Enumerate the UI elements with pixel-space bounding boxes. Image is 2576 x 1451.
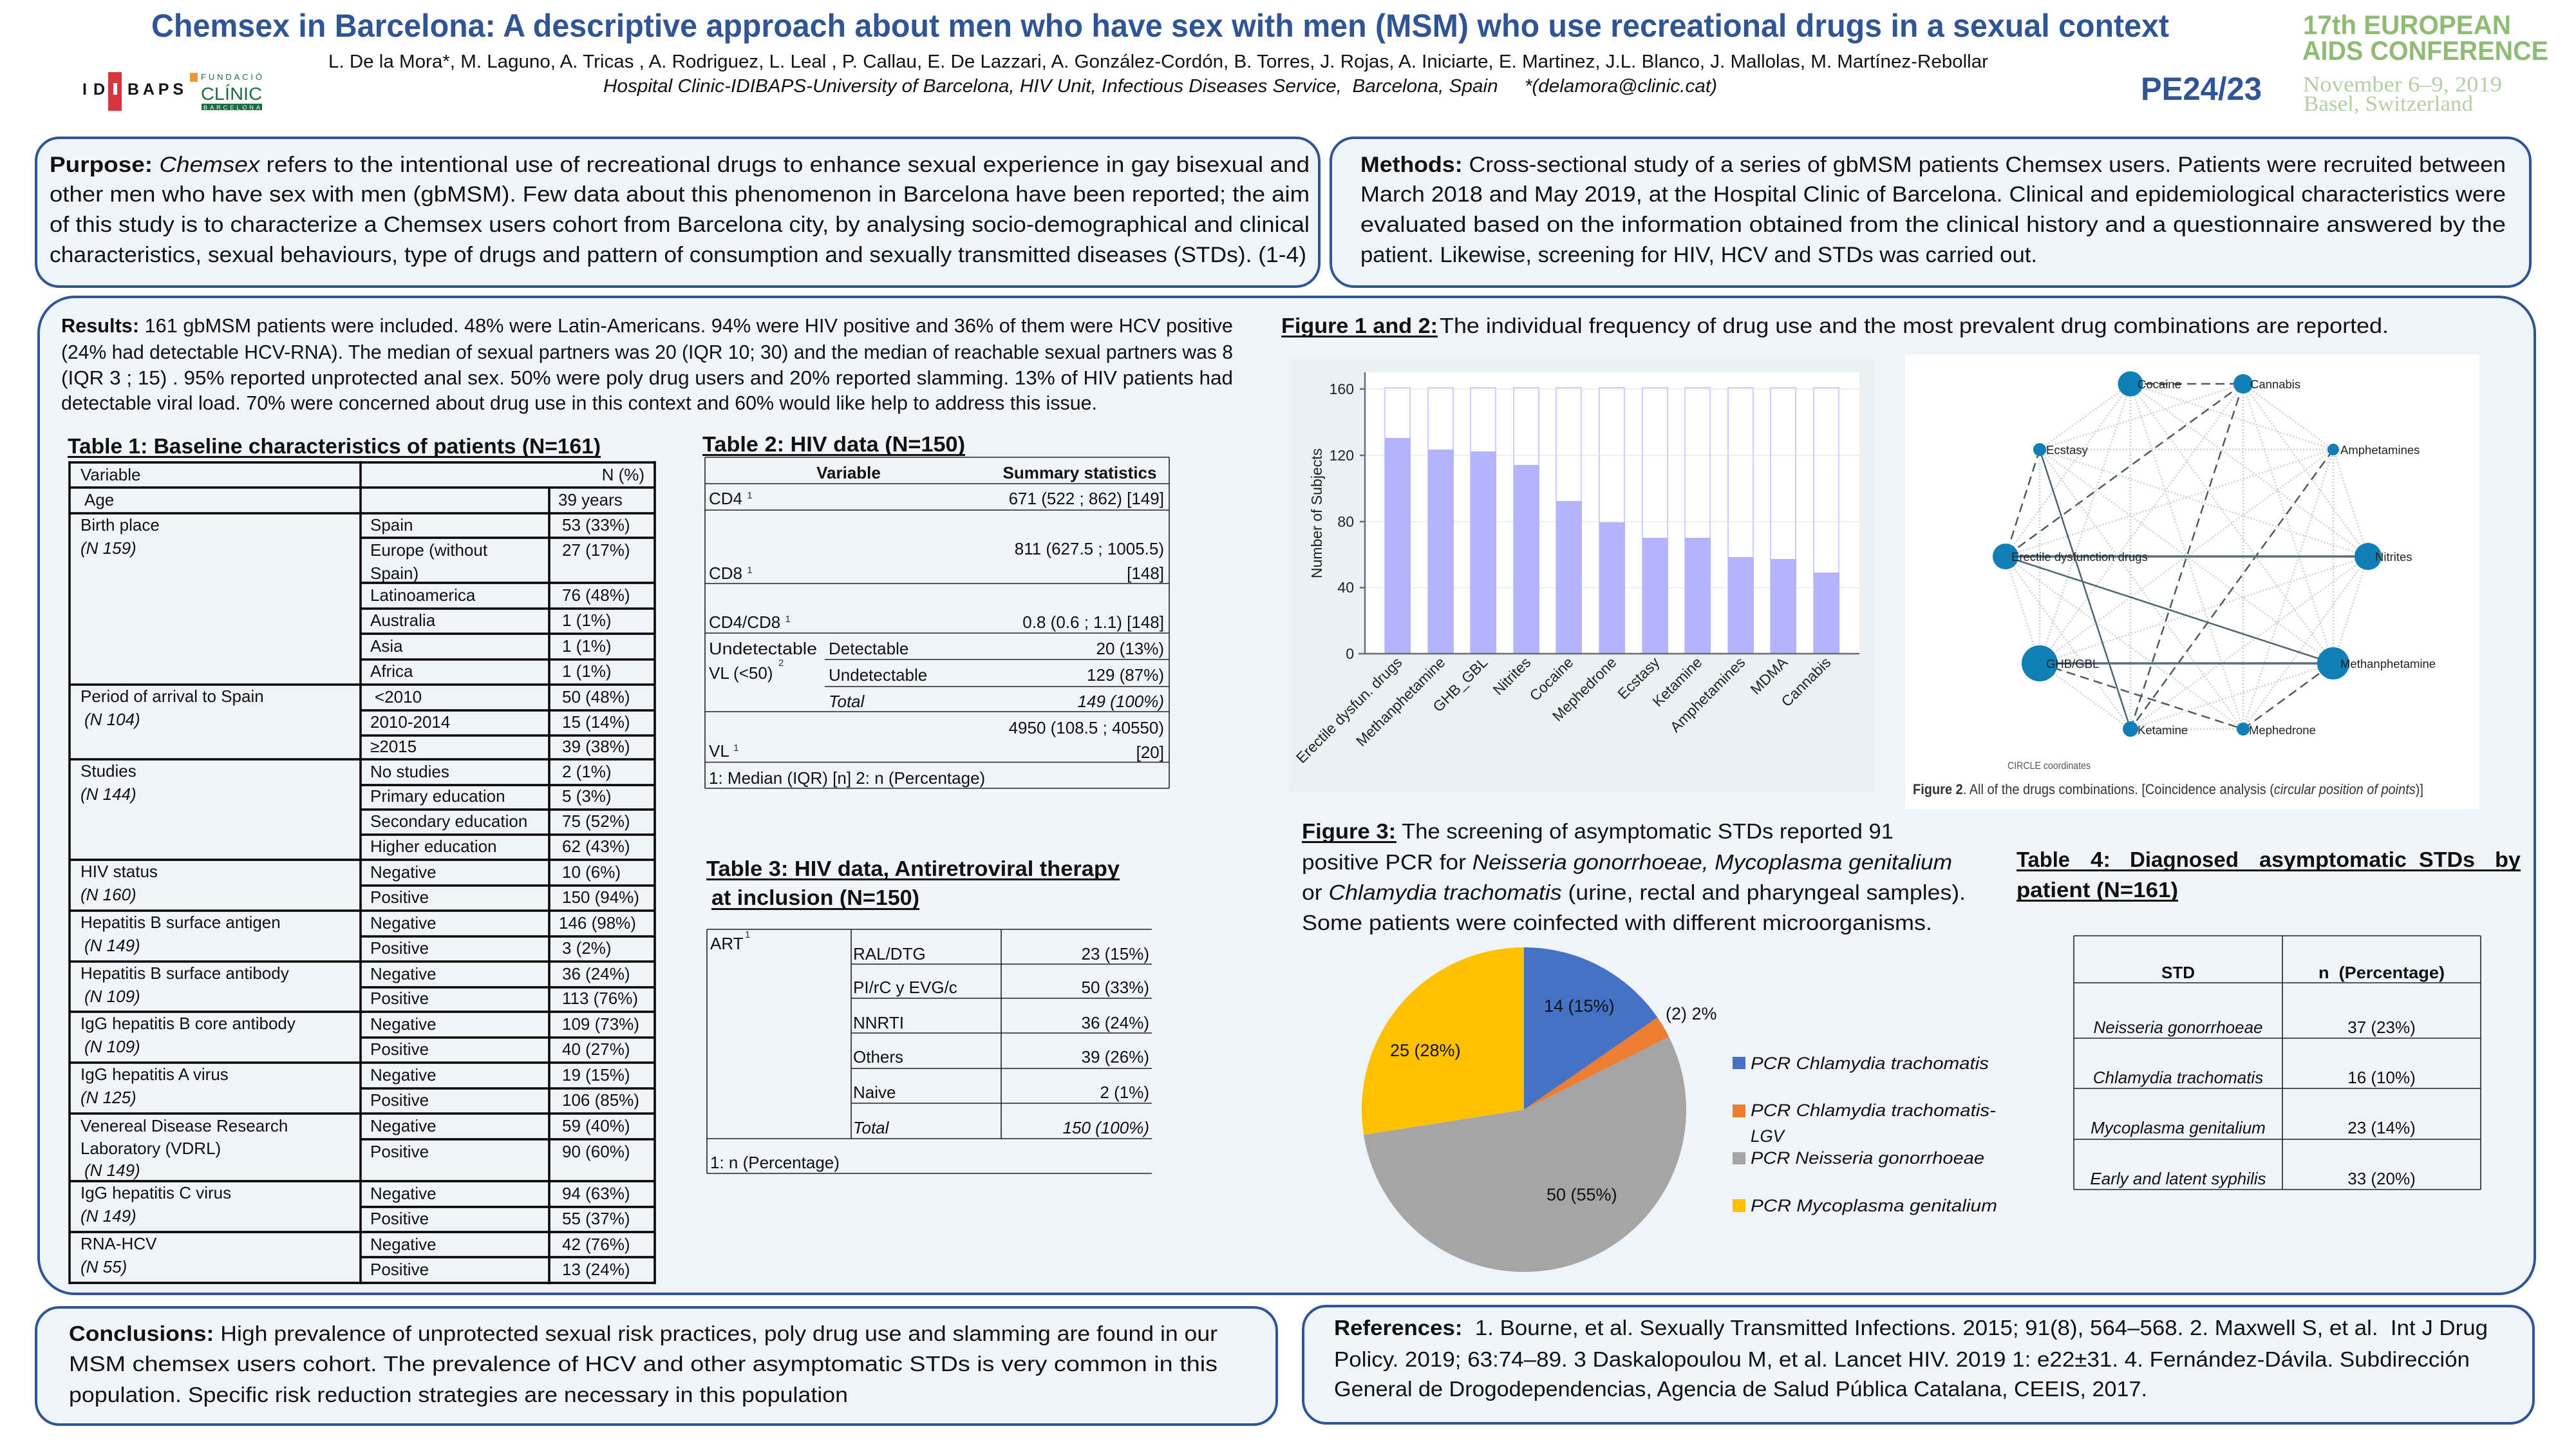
table 1: baseline characteristics: 94 (63%)	[562, 1184, 630, 1203]
x axis labels: Cocaine	[1526, 654, 1577, 704]
table 2: HIV data: 671 (522 ; 862) [149]	[1009, 489, 1164, 508]
y axis labels: 0	[1346, 645, 1354, 662]
pie chart: asymptomatic STDs: 14 (15%)	[1544, 996, 1615, 1016]
table 1: baseline characteristics: 90 (60%)	[562, 1142, 630, 1161]
table 4: diagnosed asymptomatic STDs: 33 (20%)	[2347, 1169, 2416, 1188]
table 1: baseline characteristics: 42 (76%)	[562, 1235, 630, 1254]
affiliation: Hospital Clinic-IDIBAPS-University of Barcelona, HIV Unit, Infectious Diseases Service, Barcelona, Spain *(delamora@clinic.cat)	[603, 76, 1717, 97]
table 1: baseline characteristics: IgG hepatitis C virus	[80, 1183, 231, 1202]
table 2: HIV data: [20]	[1136, 743, 1164, 762]
table 2: HIV data: Undetectable	[829, 665, 927, 685]
conference logo: Basel, Switzerland	[2304, 92, 2473, 116]
table 3: antiretroviral therapy: ART	[710, 934, 744, 953]
table 2: HIV data: 20 (13%)	[1096, 639, 1164, 658]
table 3: antiretroviral therapy: 1	[745, 929, 750, 940]
table 2: HIV data: Undetectable	[709, 639, 817, 658]
table 2: HIV data: Total	[829, 692, 865, 711]
table 1: baseline characteristics: 1 (1%)	[562, 636, 612, 656]
table 1: baseline characteristics: (N 144)	[80, 784, 136, 804]
panel: conclusions: population. Specific risk reduction strategies are necessary in this population	[69, 1383, 848, 1407]
table 4: diagnosed asymptomatic STDs: 23 (14%)	[2347, 1118, 2416, 1137]
table 4: diagnosed asymptomatic STDs: n (Percentage)	[2318, 963, 2445, 982]
table 1: baseline characteristics: IgG hepatitis A virus	[80, 1065, 229, 1084]
table 2: HIV data: Detectable	[829, 639, 908, 658]
logo: IDIBAPS: BAPS	[127, 81, 183, 99]
pie chart legend: PCR Chlamydia trachomatis	[1751, 1054, 1989, 1073]
network diagram: drug combinations: Cocaine	[2138, 377, 2181, 391]
x axis labels: Ketamine	[1649, 654, 1706, 710]
table 3: antiretroviral therapy: PI/rC y EVG/c	[853, 978, 957, 997]
network diagram: drug combinations: CIRCLE coordinates	[2007, 761, 2091, 772]
x axis labels	[1293, 654, 1834, 766]
results text: Results: 161 gbMSM patients were included. 48% were Latin-Americans. 94% were HIV positive and 36% of them were HCV positive	[61, 314, 1233, 337]
results text	[61, 314, 1233, 414]
table 1: baseline characteristics: Positive	[370, 887, 429, 907]
table 1: baseline characteristics: Laboratory (VDRL)	[80, 1139, 221, 1158]
table 4: diagnosed asymptomatic STDs: 16 (10%)	[2347, 1068, 2416, 1087]
table 3 heading: at inclusion (N=150)	[711, 886, 919, 909]
table 2: HIV data: VL	[709, 741, 729, 761]
table 1: baseline characteristics: Birth place	[80, 515, 160, 535]
table 3: antiretroviral therapy: 36 (24%)	[1082, 1013, 1149, 1032]
y axis labels: 80	[1337, 513, 1354, 530]
panel: purpose	[36, 138, 1319, 287]
panel: results	[39, 297, 2535, 1294]
table 1: baseline characteristics: Studies	[80, 761, 136, 781]
table 1: baseline characteristics: Positive	[370, 989, 429, 1008]
table 4 heading: STDs	[2419, 848, 2475, 871]
table 1: baseline characteristics: Hepatitis B surface antigen	[80, 913, 281, 932]
table 1: baseline characteristics: (N 109)	[84, 987, 140, 1006]
table 1: baseline characteristics: Spain)	[370, 564, 418, 583]
panel: methods: evaluated based on the information obtained from the clinical history and a questionnaire answered by the	[1360, 213, 2506, 237]
table 1: baseline characteristics: Age	[84, 490, 114, 509]
table 4: diagnosed asymptomatic STDs: 37 (23%)	[2347, 1018, 2416, 1037]
x axis labels: Erectile dysfun. drugs	[1293, 654, 1406, 766]
x axis labels: Ecstasy	[1614, 654, 1663, 702]
logo: Fundació Clínic: FUNDACIÓ	[201, 72, 262, 82]
table 2 heading: Table 2: HIV data (N=150)	[702, 432, 965, 456]
x axis labels: Cannabis	[1778, 654, 1834, 710]
table 2: HIV data: 149 (100%)	[1078, 692, 1164, 711]
table 1: baseline characteristics: 62 (43%)	[562, 837, 630, 856]
pie chart: asymptomatic STDs: (2) 2%	[1666, 1004, 1717, 1023]
table 1: baseline characteristics: Spain	[370, 515, 413, 535]
table 4: diagnosed asymptomatic STDs: STD	[2161, 963, 2195, 982]
table 1: baseline characteristics: RNA-HCV	[80, 1234, 157, 1253]
table 1: baseline characteristics: Negative	[370, 964, 437, 983]
table 1: baseline characteristics: Positive	[370, 1260, 429, 1279]
y axis labels: 120	[1330, 447, 1354, 464]
table 1: baseline characteristics: 75 (52%)	[562, 811, 630, 831]
table 3: antiretroviral therapy: 150 (100%)	[1063, 1118, 1149, 1137]
table 1: baseline characteristics: 146 (98%)	[559, 913, 636, 933]
table 1: baseline characteristics: Negative	[370, 1184, 437, 1203]
table 3 heading: Table 3: HIV data, Antiretroviral therapy	[706, 857, 1120, 880]
table 3: antiretroviral therapy: 2 (1%)	[1100, 1083, 1149, 1102]
table 4: diagnosed asymptomatic STDs: Chlamydia trachomatis	[2093, 1068, 2263, 1087]
network diagram: drug combinations	[1905, 355, 2479, 809]
pie chart legend: PCR Mycoplasma genitalium	[1751, 1196, 1997, 1215]
table 2: HIV data: VL (<50)	[709, 663, 773, 683]
table 1: baseline characteristics: Negative	[370, 1235, 437, 1254]
table 1: baseline characteristics: HIV status	[80, 862, 158, 881]
table 1: baseline characteristics: 1 (1%)	[562, 661, 612, 681]
table 1: baseline characteristics: Negative	[370, 1116, 437, 1135]
network diagram: drug combinations: Mephedrone	[2249, 723, 2316, 737]
table 1: baseline characteristics: <2010	[375, 687, 422, 707]
table 1: baseline characteristics	[70, 461, 655, 1284]
table 3: antiretroviral therapy: Others	[853, 1047, 903, 1067]
table 1: baseline characteristics: Positive	[370, 938, 429, 958]
logo: Fundació Clínic	[190, 72, 262, 111]
bar chart: drug frequency	[1289, 359, 1874, 792]
table 1: baseline characteristics: 150 (94%)	[562, 887, 639, 907]
filled bars	[1385, 438, 1839, 654]
table 4: diagnosed asymptomatic STDs	[2074, 936, 2481, 1190]
table 1: baseline characteristics: (N 149)	[84, 1161, 140, 1180]
table 2: HIV data: 0.8 (0.6 ; 1.1) [148]	[1022, 612, 1164, 632]
pie chart: asymptomatic STDs: 25 (28%)	[1390, 1041, 1461, 1060]
y axis labels: 160	[1330, 381, 1354, 397]
x axis labels: MDMA	[1747, 654, 1791, 697]
table 2: HIV data: 1	[747, 565, 753, 576]
table 1: baseline characteristics: Australia	[370, 611, 436, 630]
network diagram: drug combinations: Figure 2. All of the drugs combinations. [Coincidence analysis (circular position of points)]	[1913, 781, 2423, 797]
table 1: baseline characteristics: ≥2015	[370, 737, 417, 756]
table 2: HIV data: 129 (87%)	[1087, 665, 1164, 685]
table 1: baseline characteristics: IgG hepatitis B core antibody	[80, 1014, 296, 1033]
panel: methods	[1331, 138, 2530, 287]
table 1: baseline characteristics: Positive	[370, 1209, 429, 1228]
pie chart legend: PCR Chlamydia trachomatis-	[1751, 1101, 1996, 1120]
table 1: baseline characteristics: Negative	[370, 1014, 437, 1034]
table 4 heading: by	[2495, 848, 2521, 871]
table 3: antiretroviral therapy: RAL/DTG	[853, 944, 926, 963]
table 4: diagnosed asymptomatic STDs: Early and latent syphilis	[2090, 1169, 2266, 1188]
network diagram: drug combinations: GHB/GBL	[2046, 657, 2099, 670]
table 1: baseline characteristics: Primary education	[370, 786, 505, 806]
table 1: baseline characteristics: (N 149)	[80, 1206, 136, 1226]
pie chart: asymptomatic STDs	[1362, 947, 1717, 1272]
table 1: baseline characteristics: Positive	[370, 1090, 429, 1110]
panel: methods: patient. Likewise, screening for HIV, HCV and STDs was carried out.	[1360, 243, 2037, 267]
table 1: baseline characteristics: (N 125)	[80, 1088, 136, 1107]
table 1: baseline characteristics: 55 (37%)	[562, 1209, 630, 1228]
table 4 heading: Table	[2017, 848, 2070, 871]
table 1: baseline characteristics: Negative	[370, 1065, 437, 1085]
y axis labels	[1308, 381, 1354, 662]
table 1: baseline characteristics: 53 (33%)	[562, 515, 630, 535]
figure 3 text: Figure 3: The screening of asymptomatic STDs reported 91	[1302, 819, 1894, 843]
table 1: baseline characteristics: 59 (40%)	[562, 1116, 630, 1135]
table 4: diagnosed asymptomatic STDs: Mycoplasma genitalium	[2091, 1118, 2266, 1137]
network diagram: drug combinations: Erectile dysfunction drugs	[2011, 550, 2148, 564]
x axis labels: Nitrites	[1490, 654, 1534, 698]
table 3: antiretroviral therapy	[707, 929, 1152, 1173]
table 2: HIV data: 1	[785, 614, 791, 625]
pie chart: asymptomatic STDs: 50 (55%)	[1547, 1185, 1617, 1204]
table 1: baseline characteristics: Latinoamerica	[370, 585, 476, 605]
table 1: baseline characteristics: Positive	[370, 1039, 429, 1059]
results text: (IQR 3 ; 15) . 95% reported unprotected anal sex. 50% were poly drug users and 20% reported slamming. 13% of HIV patients had	[61, 366, 1233, 389]
table 2: HIV data: 1	[747, 490, 753, 501]
logo: Fundació Clínic: BARCELONA	[203, 104, 260, 111]
x axis labels: Amphetamines	[1667, 654, 1749, 735]
x axis labels: Mephedrone	[1549, 654, 1620, 725]
table 1: baseline characteristics: 15 (14%)	[562, 712, 630, 732]
results text: (24% had detectable HCV-RNA). The median of sexual partners was 20 (IQR 10; 30) and the median of reachable sexual partners was 8	[61, 341, 1233, 363]
table 1: baseline characteristics: 3 (2%)	[562, 938, 612, 958]
table 1: baseline characteristics: 2 (1%)	[562, 762, 612, 781]
table 1: baseline characteristics: Negative	[370, 862, 437, 882]
table 1: baseline characteristics: 106 (85%)	[562, 1090, 639, 1110]
table 1: baseline characteristics: 2010-2014	[370, 712, 450, 732]
pie chart legend	[1733, 1054, 1997, 1215]
table 2: HIV data: CD4/CD8	[709, 612, 780, 632]
table 3: antiretroviral therapy: 39 (26%)	[1082, 1047, 1149, 1067]
table 1: baseline characteristics: Asia	[370, 636, 403, 656]
table 3: antiretroviral therapy: Naive	[853, 1083, 896, 1102]
panel: purpose: Purpose: Chemsex refers to the intentional use of recreational drugs to enhance sexual experience in gay bisexual and	[50, 153, 1310, 177]
table 1: baseline characteristics: Higher education	[370, 837, 497, 856]
network diagram: drug combinations: Methanphetamine	[2340, 657, 2436, 670]
table 1: baseline characteristics: (N 149)	[84, 936, 140, 955]
poster number: PE24/23	[2141, 71, 2262, 107]
panel: purpose: characteristics, sexual behaviours, type of drugs and pattern of consumption and sexually transmitted diseases (STDs). (1-4)	[50, 243, 1306, 267]
table 1: baseline characteristics: 36 (24%)	[562, 964, 630, 983]
table 1: baseline characteristics: Africa	[370, 661, 413, 681]
panel: references: Policy. 2019; 63:74–89. 3 Daskalopoulou M, et al. Lancet HIV. 2019 1: e22±31. 4. Fernández-Dávila. Subdirección	[1334, 1347, 2470, 1371]
conference logo: November 6–9, 2019	[2303, 73, 2502, 97]
panel: purpose: of this study is to characterize a Chemsex users cohort from Barcelona city, by analysing socio-demographical and clinical	[50, 213, 1310, 237]
figures 1 and 2 heading: Figure 1 and 2:	[1281, 314, 1438, 337]
table 2: HIV data: 2	[778, 658, 784, 669]
table 1: baseline characteristics: Period of arrival to Spain	[80, 687, 264, 706]
table 1: baseline characteristics: (N 160)	[80, 885, 136, 904]
x axis labels: GHB_GBL	[1429, 654, 1491, 715]
table 1: baseline characteristics: (N 159)	[80, 538, 136, 558]
figures 1 and 2 heading: The individual frequency of drug use and the most prevalent drug combinations are reported.	[1440, 314, 2389, 337]
pie chart legend: PCR Neisseria gonorrhoeae	[1751, 1148, 1984, 1168]
conference logo: AIDS CONFERENCE	[2302, 35, 2548, 66]
table 1: baseline characteristics: 10 (6%)	[562, 862, 621, 882]
panel: conclusions: MSM chemsex users cohort. The prevalence of HCV and other asymptomatic STDs is very common in this	[69, 1352, 1217, 1376]
panel: purpose: other men who have sex with men (gbMSM). Few data about this phenomenon in Barcelona have been reported; the aim	[50, 182, 1310, 207]
table 2: HIV data: Variable	[816, 463, 881, 482]
table 1: baseline characteristics: Secondary education	[370, 811, 527, 831]
panel: methods: March 2018 and May 2019, at the Hospital Clinic of Barcelona. Clinical and epidemiological characteristics were	[1360, 182, 2506, 207]
table 3: antiretroviral therapy: 50 (33%)	[1082, 978, 1149, 997]
table 4 heading: asymptomatic	[2259, 848, 2407, 871]
table 3 heading	[706, 857, 1120, 910]
table 2: HIV data: CD8	[709, 564, 742, 583]
table 1: baseline characteristics: No studies	[370, 762, 449, 781]
table 4 heading: Diagnosed	[2130, 848, 2239, 871]
table 1: baseline characteristics: (N 104)	[84, 710, 140, 729]
table 1: baseline characteristics: (N 109)	[84, 1037, 140, 1056]
table 1: baseline characteristics: Europe (without	[370, 540, 488, 560]
network diagram: drug combinations: Ketamine	[2138, 723, 2188, 737]
panel: references: References: 1. Bourne, et al. Sexually Transmitted Infections. 2015; 91(8), 564–568. 2. Maxwell S, et al. Int J Drug	[1334, 1316, 2488, 1340]
table 1: baseline characteristics: (N 55)	[80, 1257, 127, 1276]
table 3: antiretroviral therapy: NNRTI	[853, 1013, 904, 1032]
table 4 heading: 4:	[2091, 848, 2111, 871]
panel: references: General de Drogodependencias, Agencia de Salud Pública Catalana, CEEIS, 2017.	[1334, 1377, 2147, 1401]
panel: conclusions: Conclusions: High prevalence of unprotected sexual risk practices, poly drug use and slamming are found in our	[69, 1322, 1217, 1345]
table 2: HIV data: CD4	[709, 489, 742, 508]
table 1: baseline characteristics: Variable	[80, 465, 140, 484]
network diagram: drug combinations: Ecstasy	[2046, 443, 2089, 457]
figure 3 text: Some patients were coinfected with different microorganisms.	[1302, 911, 1932, 934]
table 1: baseline characteristics: 27 (17%)	[562, 540, 630, 560]
table 1: baseline characteristics: 39 years	[558, 490, 623, 509]
conference logo: 17th EUROPEAN	[2303, 10, 2511, 40]
panel: references	[1303, 1306, 2534, 1423]
table 2: HIV data: 1	[733, 743, 738, 754]
table 3: antiretroviral therapy: 23 (15%)	[1082, 944, 1149, 963]
table 4 heading: patient (N=161)	[2017, 878, 2178, 902]
pie chart legend: LGV	[1751, 1126, 1786, 1146]
table 1: baseline characteristics: 113 (76%)	[562, 989, 638, 1008]
authors: L. De la Mora*, M. Laguno, A. Tricas , A. Rodriguez, L. Leal , P. Callau, E. De Lazzari, A. González-Cordón, B. Torres, J. Rojas, A. Iniciarte, E. Martinez, J.L. Blanco, J. Mallolas, M. Martínez-Rebollar	[328, 52, 1988, 72]
table 1: baseline characteristics: 1 (1%)	[562, 611, 612, 630]
table 2: HIV data: Summary statistics	[1003, 463, 1156, 482]
title: Chemsex in Barcelona: A descriptive approach about men who have sex with men (MSM) who use recreational drugs in a sexual context	[151, 8, 2169, 44]
table 4 heading	[2017, 848, 2521, 902]
network diagram: drug combinations: Cannabis	[2250, 377, 2300, 391]
table 1 heading: Table 1: Baseline characteristics of patients (N=161)	[68, 434, 601, 458]
logo: Fundació Clínic: CLÍNIC	[201, 84, 262, 104]
x axis labels: Methanphetamine	[1353, 654, 1449, 750]
table 2: HIV data: 4950 (108.5 ; 40550)	[1009, 718, 1164, 737]
table 1: baseline characteristics: 40 (27%)	[562, 1039, 630, 1059]
logo: IDIBAPS	[82, 72, 183, 111]
network diagram: drug combinations: Nitrites	[2375, 550, 2412, 564]
figure 3 text	[1302, 819, 1966, 934]
conference logo	[2302, 10, 2548, 116]
panel: conclusions	[36, 1307, 1277, 1425]
table 1: baseline characteristics: 19 (15%)	[562, 1065, 630, 1085]
table 1: baseline characteristics: 5 (3%)	[562, 786, 612, 806]
logo: IDIBAPS: ID	[82, 81, 105, 99]
table 3: antiretroviral therapy: Total	[853, 1118, 890, 1137]
table 3: antiretroviral therapy: 1: n (Percentage)	[710, 1153, 840, 1172]
network diagram: drug combinations: Amphetamines	[2340, 443, 2420, 457]
y axis labels: Number of Subjects	[1308, 448, 1325, 578]
table 2: HIV data	[705, 457, 1169, 788]
table 1: baseline characteristics: Venereal Disease Research	[80, 1116, 288, 1135]
table 1: baseline characteristics: 13 (24%)	[562, 1260, 630, 1279]
table 2: HIV data: [148]	[1127, 564, 1164, 583]
table 2: HIV data: 1: Median (IQR) [n] 2: n (Percentage)	[709, 768, 985, 788]
table 1: baseline characteristics: 50 (48%)	[562, 687, 630, 707]
table 1: baseline characteristics: 76 (48%)	[562, 585, 630, 605]
table 1: baseline characteristics: Negative	[370, 913, 437, 933]
table 1: baseline characteristics: N (%)	[602, 465, 644, 484]
y axis labels: 40	[1337, 579, 1354, 596]
outline bars	[1385, 388, 1839, 654]
table 1: baseline characteristics: Positive	[370, 1142, 429, 1161]
table 1: baseline characteristics: 39 (38%)	[562, 737, 630, 756]
figure 3 text: positive PCR for Neisseria gonorrhoeae, Mycoplasma genitalium	[1302, 850, 1952, 874]
panel: methods: Methods: Cross-sectional study of a series of gbMSM patients Chemsex users. Patients were recruited between	[1360, 153, 2506, 177]
table 4: diagnosed asymptomatic STDs: Neisseria gonorrhoeae	[2093, 1018, 2263, 1037]
table 2: HIV data: 811 (627.5 ; 1005.5)	[1015, 539, 1164, 558]
results text: detectable viral load. 70% were concerned about drug use in this context and 60% would like help to address this issue.	[61, 392, 1097, 414]
figure 3 text: or Chlamydia trachomatis (urine, rectal and pharyngeal samples).	[1302, 880, 1966, 904]
table 1: baseline characteristics: Hepatitis B surface antibody	[80, 963, 289, 983]
table 1: baseline characteristics: 109 (73%)	[562, 1014, 639, 1034]
